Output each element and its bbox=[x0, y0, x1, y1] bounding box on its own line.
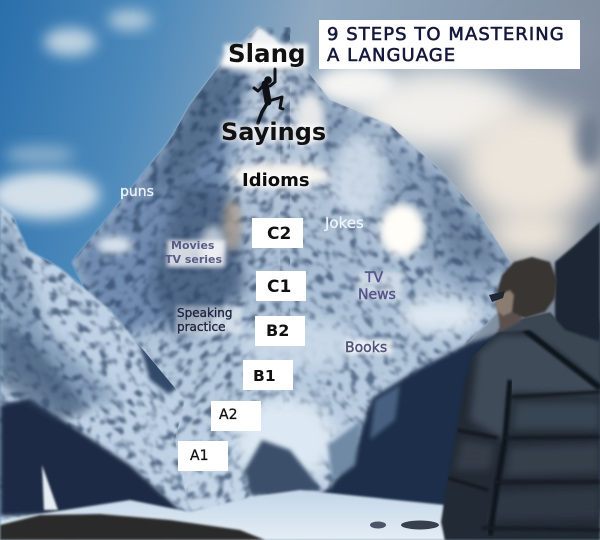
level box: C2: C2 bbox=[267, 224, 291, 244]
level box: B2: B2 bbox=[266, 321, 289, 340]
label: Idioms: Idioms bbox=[242, 170, 310, 191]
level box: B1 bbox=[243, 360, 293, 390]
person: man in puffer jacket bbox=[441, 257, 600, 540]
right dark ridge bbox=[245, 222, 600, 510]
level box: C1 bbox=[256, 271, 306, 301]
main peak bbox=[60, 20, 530, 520]
label: puns: puns bbox=[120, 184, 154, 200]
label: TV News bbox=[358, 270, 402, 303]
label: Movies TV series bbox=[165, 239, 225, 267]
level box: A2: A2 bbox=[219, 407, 237, 423]
label: Sayings: Sayings bbox=[221, 118, 326, 146]
level box: C1: C1 bbox=[267, 277, 291, 297]
label: Jokes: Jokes bbox=[324, 214, 364, 232]
level box: B1: B1 bbox=[253, 367, 276, 385]
left foreground ridge bbox=[0, 200, 195, 520]
right face shading and rock bbox=[280, 27, 510, 492]
label: Movies TV series: TV series bbox=[165, 253, 223, 266]
icon: climber silhouette bbox=[254, 69, 283, 123]
level box: A1 bbox=[178, 441, 228, 471]
glacier and foreground snow bbox=[0, 490, 445, 540]
clouds bbox=[0, 10, 600, 260]
level box: C2 bbox=[252, 218, 303, 248]
level box: A1: A1 bbox=[190, 448, 208, 464]
collar bbox=[497, 313, 600, 382]
label: Speaking practice: Speaking bbox=[177, 306, 232, 320]
label: Sayings: Sayings bbox=[221, 118, 326, 146]
level box: B2 bbox=[255, 316, 305, 346]
left face shading and rock bbox=[72, 27, 290, 510]
label: Movies TV series: Movies bbox=[171, 239, 215, 252]
title box: 9 STEPS TO MASTERING bbox=[327, 24, 565, 45]
label: TV News: News bbox=[358, 287, 396, 303]
head bbox=[497, 257, 557, 318]
label: Slang: Slang bbox=[228, 39, 306, 68]
label: Books: Books bbox=[345, 340, 387, 356]
snow and cloud on the peak bbox=[97, 27, 480, 482]
label: Speaking practice bbox=[176, 306, 242, 334]
label: TV News: TV bbox=[364, 270, 384, 286]
title box: A LANGUAGE bbox=[327, 45, 456, 66]
jacket bbox=[441, 313, 600, 540]
neck bbox=[497, 300, 530, 332]
label: Speaking practice: practice bbox=[177, 320, 226, 334]
label: Idioms: Idioms bbox=[242, 170, 310, 191]
level box: A2 bbox=[211, 401, 261, 431]
title box bbox=[319, 20, 580, 69]
